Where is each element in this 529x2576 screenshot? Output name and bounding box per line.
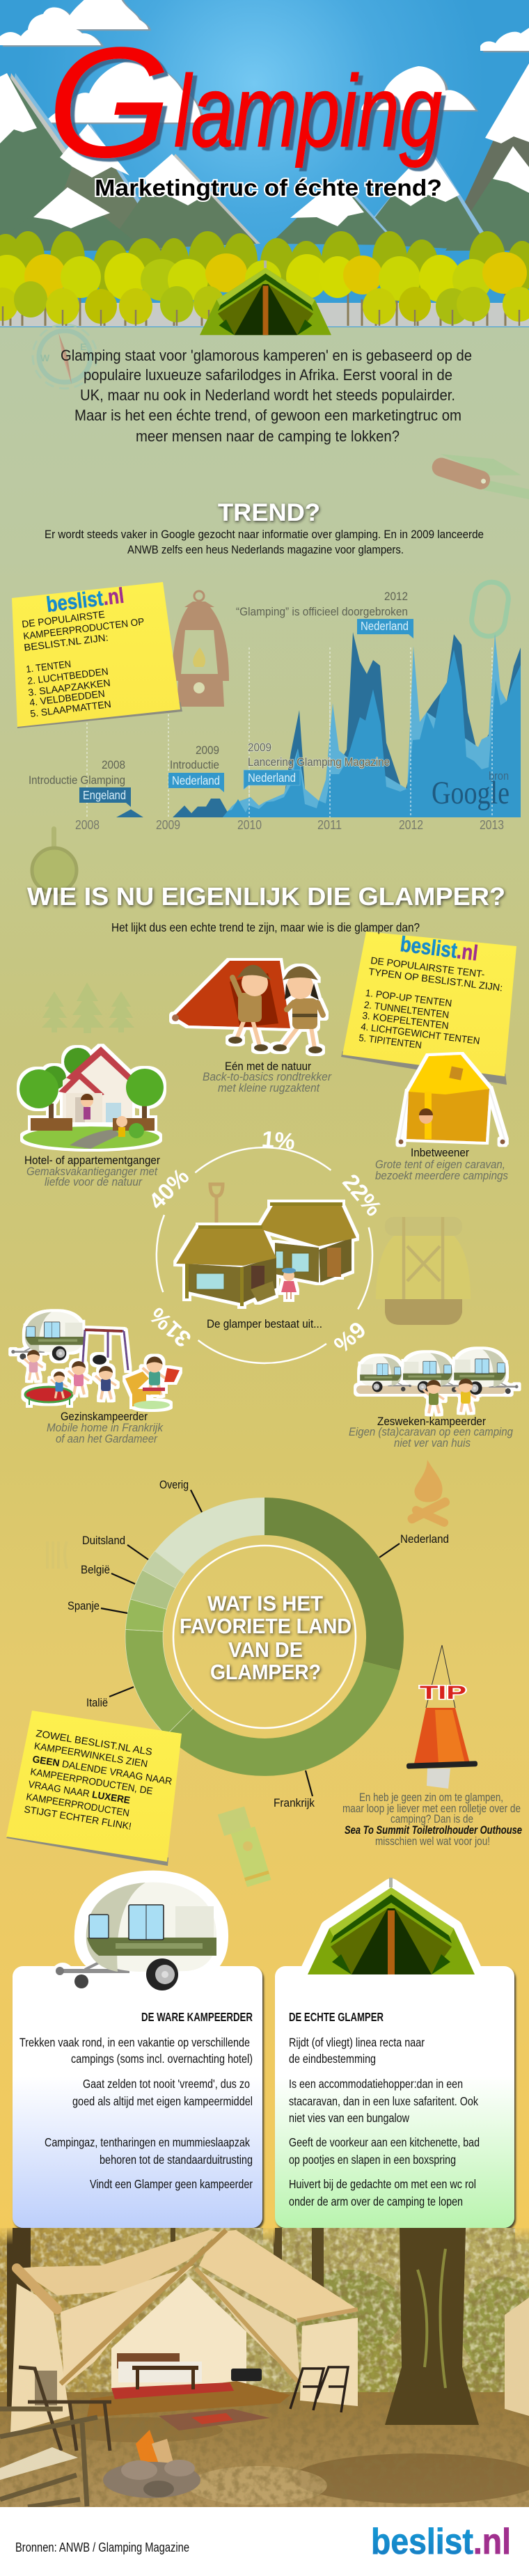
card text: niet vies van een bungalow: [289, 2111, 409, 2125]
callout: 2012: Nederland: [361, 619, 409, 633]
value: 22 percent: 22%: [338, 1169, 387, 1221]
card text: Trekken vaak rond, in een vakantie op verschillende: [19, 2036, 250, 2050]
callout: 2009 magazine: 2009: [248, 741, 271, 754]
card text: DE ECHTE GLAMPER: [289, 2010, 384, 2024]
icon: lantern: [172, 591, 229, 707]
note text: GEEN DALENDE VRAAG NAAR: [32, 1753, 173, 1786]
source: google: Google: [432, 775, 510, 811]
axis labels: 2009: [156, 818, 180, 832]
illustration: family with playground: [11, 1312, 180, 1409]
label: een met de natuur: met kleine rugzaktent: [218, 1081, 320, 1094]
card text: goed als altijd met eigen kampeermiddel: [72, 2094, 253, 2108]
axis labels: 2008: [75, 818, 100, 832]
label: gezinskampeerder: [47, 1410, 164, 1445]
donut heading: WAT IS HET: [207, 1592, 323, 1615]
card text: onder de arm over de camping te lopen: [289, 2194, 463, 2208]
heading: who is the glamper: WIE IS NU EIGENLIJK DIE GLAMPER?: [27, 882, 505, 911]
card text: Gaat zelden tot nooit 'vreemd', dus zo: [83, 2077, 250, 2091]
tip: toilet roll holder: [406, 1645, 477, 1789]
icon: pocket knife: [429, 441, 529, 505]
segment: spanje: [125, 1599, 167, 1631]
note text: 1. POP-UP TENTEN: [365, 987, 452, 1009]
country labels: België: [81, 1563, 110, 1576]
icon: skillet: [32, 826, 77, 893]
illustration: three caravans with kids: [356, 1349, 519, 1413]
segment: belgie: [131, 1570, 175, 1609]
card text: Huivert bij de gedachte om met een wc rol: [289, 2177, 476, 2191]
bed and furniture: [87, 2381, 290, 2417]
area chart: google trends: [29, 590, 521, 832]
callout: 2009 introductie: [168, 744, 224, 792]
icon: carabiner: [469, 580, 511, 638]
front rug, chairs and campfire: [0, 2367, 270, 2507]
post-it: popular camping products: [12, 582, 182, 728]
logo: beslist.nl: beslist.nl: [399, 932, 480, 966]
note text: TYPEN OP BESLIST.NL ZIJN:: [368, 966, 503, 994]
label: een met de natuur: Back-to-basics rondtrekker: [203, 1070, 332, 1083]
country labels: Italië: [86, 1696, 108, 1709]
callout: 2009 introductie: Introductie: [170, 758, 219, 771]
intro text: Maar is het een échte trend, of gewoon een marketingtruc om: [74, 407, 461, 424]
callout: 2008: 2008: [102, 758, 125, 771]
donut chart: favourite country: [68, 1478, 449, 1809]
card text: [19, 2010, 253, 2191]
logo: beslist.nl: beslist.nl: [45, 583, 125, 617]
post-it: popular tent types: [341, 932, 516, 1085]
illustration: yellow tent: [398, 1055, 505, 1145]
series: dark: [116, 632, 521, 817]
source: google: bron: [489, 769, 509, 783]
card text: Vindt een Glamper geen kampeerder: [90, 2177, 253, 2191]
note text: 5. TIPITENTEN: [358, 1032, 423, 1051]
intro text: populaire luxueuze safarilodges in Afrika. Eerst vooral in de: [84, 366, 452, 384]
icon: cutlery: [47, 1541, 67, 1569]
title: lamping: [174, 54, 442, 168]
card text: op pootjes en slapen in een boxspring: [289, 2153, 456, 2167]
label: zesweken: [349, 1415, 513, 1450]
label: gezinskampeerder: of aan het Gardameer: [56, 1432, 158, 1445]
callout: 2008: [29, 758, 131, 807]
clouds: [0, 0, 529, 123]
note text: BESLIST.NL ZIJN:: [23, 631, 109, 653]
card text: Campingaz, tentharingen en mummieslaapzak: [45, 2135, 250, 2149]
callout: 2012: [236, 590, 413, 638]
axis labels: 2012: [399, 818, 423, 832]
note text: 3. KOEPELTENTEN: [362, 1010, 450, 1031]
callout: 2008: Engeland: [83, 788, 126, 802]
title: G: [47, 14, 171, 190]
label: een met de natuur: Eén met de natuur: [225, 1060, 311, 1073]
series: light: [223, 634, 521, 817]
note text: 1. TENTEN: [25, 658, 72, 675]
card text: campings (soms incl. overnachting hotel): [71, 2052, 253, 2066]
illustration: big green tent: [308, 1878, 475, 1974]
note text: KAMPEERPRODUCTEN, DE: [30, 1766, 154, 1796]
photo: luxury safari tent in the forest: [0, 2228, 529, 2507]
donut heading: GLAMPER?: [210, 1660, 321, 1684]
donut heading: VAN DE: [228, 1638, 303, 1662]
icon: shovel: [210, 1184, 223, 1225]
label: gezinskampeerder: Gezinskampeerder: [61, 1410, 148, 1423]
note text: 2. LUCHTBEDDEN: [26, 666, 109, 686]
note text: 4. VELDBEDDEN: [29, 688, 106, 708]
tree line: [0, 231, 529, 327]
callout: 2009 introductie: 2009: [196, 744, 219, 757]
panel: de ware kampeerder: [13, 1883, 262, 2228]
caption: glamper consists of: De glamper bestaat uit...: [207, 1317, 322, 1330]
label: zesweken: niet ver van huis: [394, 1436, 471, 1450]
icon: compass: W: [40, 352, 50, 363]
icon: compass: [33, 324, 97, 388]
illustration: caravan: [52, 1883, 216, 1990]
label: hotel: Gemaksvakantieganger met: [26, 1165, 158, 1178]
series: medium: [223, 650, 521, 817]
sources: Bronnen: ANWB / Glamping Magazine: [15, 2540, 189, 2554]
label: inbetweener: bezoekt meerdere campings: [375, 1169, 508, 1182]
axis labels: [75, 818, 504, 832]
callout: 2012: “Glamping” is officieel doorgebroken: [236, 605, 408, 618]
icon: flashlight: [218, 1805, 271, 1889]
note text: STIJGT ECHTER FLINK!: [24, 1803, 132, 1832]
note text: DE POPULAIRSTE TENT-: [370, 955, 486, 980]
country labels: [68, 1478, 449, 1809]
callout: 2012: 2012: [384, 590, 408, 603]
second tent edge: [505, 2298, 529, 2416]
callout: 2008: Introductie Glamping: [29, 773, 125, 787]
segment: frankrijk: [166, 1661, 400, 1776]
callout: 2009 magazine: [244, 741, 390, 790]
value: 6 percent: 6%: [329, 1317, 371, 1358]
note text: 3. SLAAPZAKKEN: [27, 677, 111, 698]
card text: DE WARE KAMPEERDER: [141, 2010, 253, 2024]
icon: compass: E: [80, 341, 86, 352]
heading: trend: TREND?: [218, 499, 320, 526]
axis labels: 2013: [480, 818, 504, 832]
segment: nederland: [264, 1498, 404, 1670]
note text: 2. TUNNELTENTEN: [363, 999, 450, 1021]
note text: [21, 608, 145, 719]
illustration: safari lodges: [176, 1202, 356, 1306]
trend text: ANWB zelfs een heus Nederlands magazine voor glampers.: [127, 543, 404, 556]
label: inbetweener: Inbetweener: [411, 1146, 469, 1159]
tip text: [342, 1791, 522, 1848]
intro text: who: Het lijkt dus een echte trend te zijn, maar wie is die glamper dan?: [111, 920, 420, 934]
card text: Geeft de voorkeur aan een kitchenette, bad: [289, 2135, 480, 2149]
country labels: Frankrijk: [274, 1796, 315, 1809]
note text: [24, 1727, 173, 1832]
note text: ZOWEL BESLIST.NL ALS: [35, 1727, 153, 1757]
axis labels: 2010: [237, 818, 262, 832]
segment: duitsland: [143, 1551, 184, 1588]
donut heading: [180, 1592, 352, 1684]
intro text: meer mensen naar de camping te lokken?: [136, 427, 400, 445]
donut heading: FAVORIETE LAND: [180, 1614, 352, 1638]
card text: behoren tot de standaarduitrusting: [100, 2153, 253, 2167]
icon: small green tent: [200, 260, 331, 335]
country labels: Nederland: [400, 1532, 449, 1546]
axis labels: 2011: [317, 818, 342, 832]
card text: [289, 2010, 480, 2208]
percent ring: [143, 1126, 387, 1363]
trend text: [45, 528, 484, 556]
value: 40 percent: 40%: [143, 1163, 194, 1214]
logo: beslist.nl: beslist.nl: [371, 2522, 511, 2562]
note text: KAMPEERWINKELS ZIEN: [33, 1740, 148, 1769]
card text: Rijdt (of vliegt) linea recta naar: [289, 2036, 425, 2050]
note text: [358, 955, 503, 1051]
post-it: no falling demand: [6, 1711, 182, 1866]
note text: VRAAG NAAR LUXERE: [28, 1778, 131, 1806]
label: zesweken: Zesweken-kampeerder: [377, 1415, 486, 1428]
country labels: Spanje: [68, 1599, 100, 1612]
illustration: scouts and red tent: [172, 961, 323, 1053]
callout: 2009 introductie: Nederland: [172, 773, 220, 787]
intro text: [61, 347, 472, 445]
country labels: Duitsland: [82, 1534, 125, 1547]
subtitle: Marketingtruc of échte trend?: [95, 175, 442, 201]
label: hotel: [24, 1154, 160, 1188]
label: inbetweener: [375, 1146, 508, 1182]
tent: [10, 2230, 358, 2433]
label: een met de natuur: [203, 1060, 332, 1094]
label: gezinskampeerder: Mobile home in Frankrijk: [47, 1421, 164, 1434]
note text: 5. SLAAPMATTEN: [29, 698, 111, 719]
card text: stacaravan, dan in een luxe safaritent. Ook: [289, 2094, 478, 2108]
segment: overig: [155, 1498, 264, 1574]
mountains: [0, 63, 529, 251]
card text: de eindbestemming: [289, 2052, 376, 2066]
hero scene: sky, clouds and mountains: [0, 0, 529, 327]
callout: 2009 magazine: Nederland: [248, 771, 296, 785]
card text: Is een accommodatiehopper:dan in een: [289, 2077, 463, 2091]
illustration: house: [19, 1046, 164, 1149]
icon: campfire: [406, 1460, 451, 1528]
trend text: Er wordt steeds vaker in Google gezocht naar informatie over glamping. En in 2009 lanceerde: [45, 528, 484, 541]
tip label: TIP: [420, 1682, 466, 1703]
label: hotel: liefde voor de natuur: [45, 1175, 143, 1188]
trees: [7, 2228, 479, 2425]
country labels: Overig: [159, 1478, 189, 1491]
icon: fir trees: [42, 982, 134, 1033]
intro text: UK, maar nu ook in Nederland wordt het steeds populairder.: [80, 386, 455, 404]
value: 1 percent: 1%: [261, 1126, 296, 1154]
label: hotel: Hotel- of appartementganger: [24, 1154, 160, 1167]
leader lines: [101, 1490, 400, 1796]
note text: KAMPEERPRODUCTEN: [26, 1791, 130, 1819]
note text: KAMPEERPRODUCTEN OP: [22, 615, 145, 641]
tip text: misschien wel wat voor jou!: [375, 1835, 490, 1848]
intro text: Glamping staat voor 'glamorous kamperen' en is gebaseerd op de: [61, 347, 472, 364]
icon: backpack: [376, 1217, 471, 1325]
segment: italie: [125, 1629, 193, 1735]
label: inbetweener: Grote tent of eigen caravan,: [375, 1158, 505, 1171]
tip text: camping? Dan is de: [390, 1812, 473, 1825]
title: [47, 14, 442, 190]
panel: de echte glamper: [275, 1878, 514, 2228]
note text: DE POPULAIRSTE: [21, 608, 105, 629]
callout: 2009 magazine: Lancering Glamping Magazine: [248, 755, 390, 769]
footer: [0, 2507, 529, 2576]
value: 31 percent: 31%: [144, 1303, 196, 1352]
note text: 4. LICHTGEWICHT TENTEN: [361, 1021, 480, 1046]
